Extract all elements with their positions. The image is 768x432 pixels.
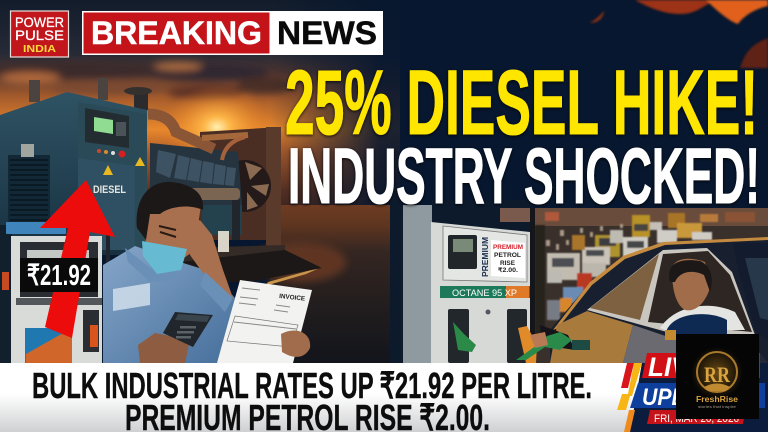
breaking news banner bbox=[82, 11, 383, 55]
invoice heading: INVOICE bbox=[279, 293, 306, 303]
premium sticker: ₹2.00. bbox=[498, 267, 518, 274]
premium sticker: PREMIUM bbox=[493, 244, 523, 251]
freshrise logo bbox=[676, 334, 759, 419]
breaking news banner: BREAKING bbox=[91, 15, 262, 51]
live updates badge: LIVE bbox=[648, 352, 707, 382]
power pulse india logo: PULSE bbox=[15, 27, 64, 43]
pump display bbox=[448, 235, 477, 269]
background: flames top right bbox=[590, 0, 768, 68]
diesel label: DIESEL bbox=[93, 184, 126, 196]
premium sticker: RISE bbox=[500, 260, 516, 267]
power pulse india logo bbox=[10, 11, 68, 57]
octane band bbox=[440, 286, 530, 299]
car with driver bbox=[540, 237, 768, 363]
breaking news banner: NEWS bbox=[277, 15, 377, 51]
live updates badge: UPDATES bbox=[642, 384, 742, 411]
power pulse india logo: POWER bbox=[15, 14, 64, 30]
ticker text bbox=[32, 365, 592, 432]
premium sticker: PETROL bbox=[494, 252, 521, 259]
freshrise logo: RR bbox=[704, 362, 731, 387]
driver bbox=[660, 306, 745, 330]
power pulse india logo: INDIA bbox=[23, 43, 56, 55]
calculator and hands bbox=[138, 312, 213, 363]
traffic background bbox=[535, 208, 768, 363]
price tag: ₹21.92 bbox=[27, 260, 91, 292]
background: ground and road bbox=[254, 205, 405, 363]
fuel pump left bbox=[0, 222, 108, 363]
price tag bbox=[20, 258, 98, 292]
man with mask bbox=[103, 182, 235, 363]
premium petrol pump bbox=[390, 200, 535, 363]
diesel engine bbox=[124, 87, 322, 282]
live updates badge bbox=[617, 352, 768, 432]
premium petrol pump: PREMIUM bbox=[481, 237, 490, 277]
bottom ticker strip bbox=[0, 363, 642, 432]
fuel nozzle bbox=[516, 326, 590, 363]
live updates badge: FRI, MAR 20, 2026 bbox=[654, 413, 739, 425]
octane band: OCTANE 95 XP bbox=[452, 288, 517, 299]
freshrise logo: FreshRise bbox=[696, 395, 739, 404]
freshrise logo: stories that inspire bbox=[698, 405, 736, 409]
premium sticker bbox=[491, 240, 525, 278]
headline bbox=[285, 52, 760, 220]
red arrow bbox=[40, 180, 115, 338]
chimneys bbox=[29, 78, 108, 102]
diesel generator cabinet bbox=[0, 92, 147, 255]
invoice bbox=[217, 280, 312, 363]
